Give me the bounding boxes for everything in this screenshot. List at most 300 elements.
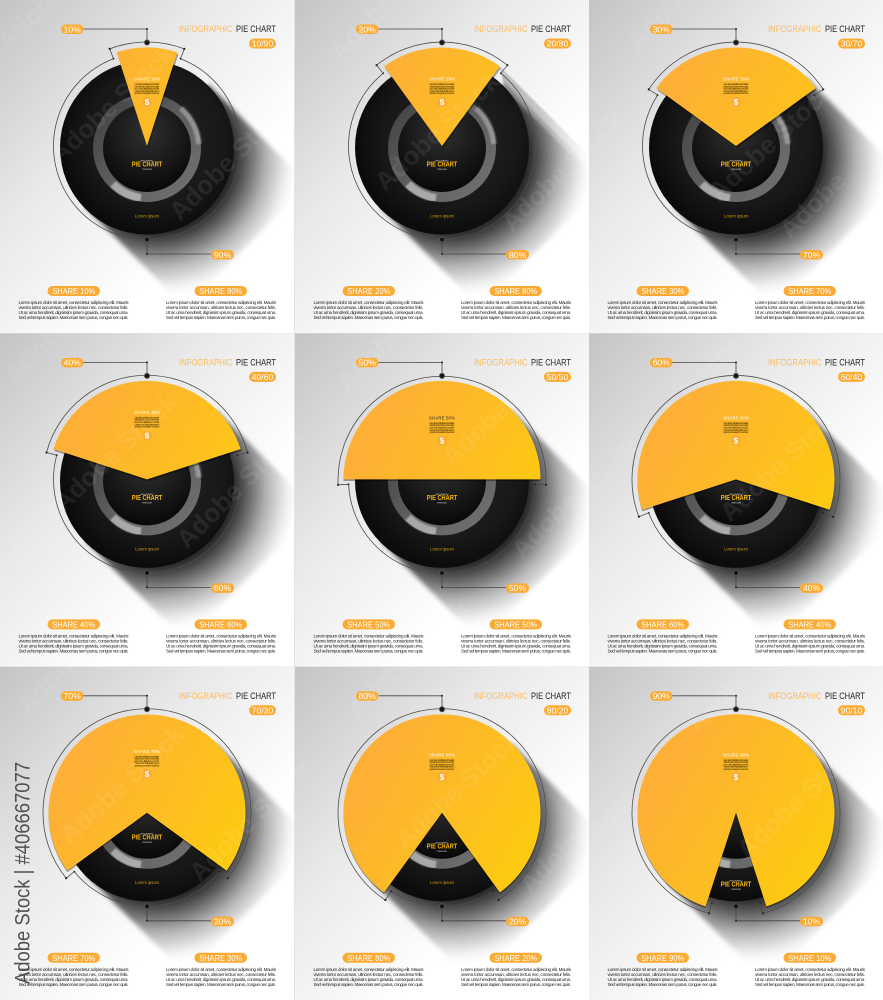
wedge text: gravida, consequat urna sed vel. <box>429 768 455 771</box>
share 30% column: Lorem ipsum dolor sit amet, consectetur adipiscing elit. Mauris <box>608 300 718 305</box>
center label: PIE CHART <box>721 495 752 502</box>
lorem label: Lorem ipsum <box>430 880 454 885</box>
share 20% column: SHARE 20% <box>494 953 538 963</box>
icon: dollar <box>731 97 741 107</box>
wedge text: adipiscing elit. Mauris viverra tortor <box>724 85 749 88</box>
share 10% column <box>18 286 129 320</box>
share 80% column: SHARE 80% <box>347 953 391 963</box>
wedge text <box>429 76 455 95</box>
title <box>179 691 277 701</box>
wedge text: gravida, consequat urna sed vel. <box>134 426 160 429</box>
share 40% column: SHARE 40% <box>788 619 832 629</box>
center label: INFOGRAPHIC <box>140 832 154 835</box>
center label <box>132 832 163 844</box>
top callout 20%: 20% <box>359 24 376 34</box>
share 80% column: Sed vel tempus sapien. Maecenas sem purus, congue nec quis. <box>314 982 424 987</box>
icon: dollar <box>142 430 152 440</box>
ratio badge: 80/20 <box>547 705 568 715</box>
icon: dollar: $ <box>440 436 445 445</box>
share 50% right column <box>461 619 572 653</box>
panel: 30/70 pie chart <box>589 0 883 333</box>
share 90% column: viverra tortor accumsan, ultricies lectus nec, consectetur felis. <box>166 305 276 310</box>
share 50% column: Ut ac urna hendrerit, dignissim ipsum gravida, consequat urna. <box>314 643 424 648</box>
share 60% column: Sed vel tempus sapien. Maecenas sem purus, congue nec quis. <box>166 648 276 653</box>
top callout 70% <box>61 691 148 710</box>
share 40% column: viverra tortor accumsan, ultricies lectus nec, consectetur felis. <box>18 638 128 643</box>
share 90% column <box>166 286 277 320</box>
top node <box>733 40 739 46</box>
share 50% column: Sed vel tempus sapien. Maecenas sem purus, congue nec quis. <box>314 648 424 653</box>
share 60% column: Ut ac urna hendrerit, dignissim ipsum gravida, consequat urna. <box>608 643 718 648</box>
wedge text: gravida, consequat urna sed vel. <box>134 764 160 767</box>
top callout 30%: 30% <box>653 24 670 34</box>
long shadow <box>83 742 292 956</box>
share 70% column: viverra tortor accumsan, ultricies lectus nec, consectetur felis. <box>18 972 128 977</box>
bottom callout 30% <box>144 903 234 927</box>
wedge text <box>723 752 749 771</box>
stock watermarks: Adobe <box>773 166 851 244</box>
share 30% column: Lorem ipsum dolor sit amet, consectetur adipiscing elit. Mauris <box>166 967 277 972</box>
black disk with ring <box>649 394 823 568</box>
share 10% column: Ut ac urna hendrerit, dignissim ipsum gravida, consequat urna. <box>18 310 128 315</box>
share 10% column: viverra tortor accumsan, ultricies lectus nec, consectetur felis. <box>755 972 865 977</box>
panel: 90/10 pie chart <box>589 667 883 1000</box>
icon: dollar: $ <box>734 436 739 445</box>
share 70% column: Ut ac urna hendrerit, dignissim ipsum gravida, consequat urna. <box>18 977 128 982</box>
stock watermarks: Adobe Stock <box>731 734 868 864</box>
share 90% column: Ut ac urna hendrerit, dignissim ipsum gravida, consequat urna. <box>608 977 718 982</box>
bottom callout 70% <box>733 236 823 260</box>
top callout 50%: 50% <box>359 358 376 368</box>
bottom callout 30%: 30% <box>214 917 231 927</box>
stock watermarks: Adobe Stock <box>170 420 304 554</box>
arc end dots <box>45 451 249 456</box>
share 20% column: Sed vel tempus sapien. Maecenas sem purus, congue nec quis. <box>461 982 571 987</box>
wedge text: adipiscing elit. Mauris viverra tortor <box>724 424 749 427</box>
share 20% column: Sed vel tempus sapien. Maecenas sem purus, congue nec quis. <box>314 315 424 320</box>
center label <box>721 160 752 171</box>
share 30% column <box>608 286 718 320</box>
share 70% column: viverra tortor accumsan, ultricies lectus nec, consectetur felis. <box>755 305 865 310</box>
center label: INFOGRAPHIC <box>435 841 449 844</box>
wedge text: Ut ac urna hendrerit, dignissim ipsum <box>724 90 748 93</box>
share 30% column: Sed vel tempus sapien. Maecenas sem purus, congue nec quis. <box>608 315 718 320</box>
long shadow <box>378 66 586 290</box>
title: INFOGRAPHIC <box>768 24 822 34</box>
wedge text: accumsan, ultricies lectus nec, felis. <box>724 88 749 91</box>
bottom callout 80% <box>439 236 529 260</box>
share 40% column: Sed vel tempus sapien. Maecenas sem purus, congue nec quis. <box>18 648 128 653</box>
long shadow <box>674 77 883 308</box>
share 40% column: Ut ac urna hendrerit, dignissim ipsum gravida, consequat urna. <box>755 643 865 648</box>
center label: PIE CHART <box>721 881 752 888</box>
title: INFOGRAPHIC <box>474 357 528 367</box>
share 50% right column: Sed vel tempus sapien. Maecenas sem purus, congue nec quis. <box>461 648 571 653</box>
title: INFOGRAPHIC <box>768 691 822 701</box>
share 40% column: Sed vel tempus sapien. Maecenas sem purus, congue nec quis. <box>755 648 865 653</box>
wedge text: SHARE 60% <box>723 415 749 420</box>
lorem label: Lorem ipsum <box>430 213 454 218</box>
wedge text: gravida, consequat urna sed vel. <box>723 768 749 771</box>
wedge text: Lorem ipsum dolor sit amet, consectetur <box>724 422 749 425</box>
share 90% column: Lorem ipsum dolor sit amet, consectetur adipiscing elit. Mauris <box>608 967 718 972</box>
share 90% column: Sed vel tempus sapien. Maecenas sem purus, congue nec quis. <box>608 982 718 987</box>
stock watermarks: Stock <box>288 870 360 941</box>
share 30% column: Sed vel tempus sapien. Maecenas sem purus, congue nec quis. <box>166 982 276 987</box>
top callout 70%: 70% <box>64 691 81 701</box>
wedge text: SHARE 50% <box>429 415 455 420</box>
bottom callout 60%: 60% <box>214 583 231 593</box>
share 80% column: Lorem ipsum dolor sit amet, consectetur adipiscing elit. Mauris <box>461 300 572 305</box>
stock watermarks: Adobe <box>331 318 409 396</box>
stock watermarks: Adobe <box>505 486 583 564</box>
wedge text: Lorem ipsum dolor sit amet, consectetur <box>135 416 160 419</box>
wedge text: SHARE 20% <box>429 76 455 82</box>
black disk with ring <box>60 394 234 568</box>
stock id vertical label: Adobe Stock | #406667077 <box>12 762 34 984</box>
icon: dollar <box>142 769 152 779</box>
share 40% column: viverra tortor accumsan, ultricies lectus nec, consectetur felis. <box>755 638 865 643</box>
wedge text: Lorem ipsum dolor sit amet, consectetur <box>724 83 749 86</box>
wedge text: gravida, consequat urna sed vel. <box>134 92 160 95</box>
wedge text: Lorem ipsum dolor sit amet, consectetur <box>430 83 455 86</box>
wedge text: adipiscing elit. Mauris viverra tortor <box>135 419 160 422</box>
share 10% column: Sed vel tempus sapien. Maecenas sem purus, congue nec quis. <box>755 982 865 987</box>
long shadow <box>83 82 290 290</box>
stock watermarks: Stock <box>573 433 645 504</box>
share 70% column: Sed vel tempus sapien. Maecenas sem purus, congue nec quis. <box>755 315 865 320</box>
stock watermarks: Adobe Stock <box>54 719 191 849</box>
black disk with ring <box>649 60 823 234</box>
title: INFOGRAPHIC <box>474 24 528 34</box>
share 40% column <box>755 619 866 653</box>
wedge text: SHARE 80% <box>429 752 455 757</box>
share 50% right column: Lorem ipsum dolor sit amet, consectetur adipiscing elit. Mauris <box>461 633 572 638</box>
ratio badge: 70/30 <box>252 705 273 715</box>
center label <box>427 841 458 853</box>
share 10% column: SHARE 10% <box>52 286 96 296</box>
icon: dollar <box>437 435 447 445</box>
share 60% column: Lorem ipsum dolor sit amet, consectetur adipiscing elit. Mauris <box>608 633 718 638</box>
title <box>768 357 866 367</box>
center label: INFOGRAPHIC <box>729 879 743 882</box>
share 40% column <box>18 619 129 653</box>
stock watermarks: Adobe Stock <box>495 103 629 237</box>
wedge text <box>134 410 160 429</box>
share 20% column: SHARE 20% <box>347 286 391 296</box>
wedge text <box>429 752 455 771</box>
outline arcs <box>338 376 546 573</box>
share 80% column: viverra tortor accumsan, ultricies lectus nec, consectetur felis. <box>461 305 571 310</box>
arc end dots <box>376 64 508 74</box>
share 80% column: Lorem ipsum dolor sit amet, consectetur adipiscing elit. Mauris <box>314 967 424 972</box>
share 40% column: SHARE 40% <box>52 619 96 629</box>
stock watermarks: Stock <box>616 890 688 961</box>
yellow wedge <box>344 714 540 894</box>
wedge text <box>723 415 749 434</box>
share 80% column: Sed vel tempus sapien. Maecenas sem purus, congue nec quis. <box>461 315 571 320</box>
center label: TEMPLATE <box>731 168 742 171</box>
icon: dollar: $ <box>145 770 150 779</box>
wedge text: gravida, consequat urna sed vel. <box>429 92 455 95</box>
title <box>768 24 866 34</box>
stock watermarks: Adobe <box>670 329 748 407</box>
share 10% column: Sed vel tempus sapien. Maecenas sem purus, congue nec quis. <box>18 315 128 320</box>
share 20% column: Lorem ipsum dolor sit amet, consectetur adipiscing elit. Mauris <box>461 967 572 972</box>
bottom callout 20%: 20% <box>509 917 526 927</box>
wedge text: accumsan, ultricies lectus nec, felis. <box>724 426 749 429</box>
center label: PIE CHART <box>132 495 163 502</box>
icon: dollar: $ <box>734 773 739 782</box>
panel: 80/20 pie chart <box>295 667 611 1000</box>
top callout 90%: 90% <box>653 691 670 701</box>
lorem label: Lorem ipsum <box>430 547 454 552</box>
share 20% column: viverra tortor accumsan, ultricies lectus nec, consectetur felis. <box>461 972 571 977</box>
title: PIE CHART <box>531 357 572 367</box>
ratio badge: 40/60 <box>252 372 273 382</box>
icon: dollar: $ <box>440 98 445 107</box>
wedge text <box>723 76 749 95</box>
stock watermarks: Adobe <box>341 646 419 724</box>
yellow wedge <box>48 714 246 872</box>
wedge text: Ut ac urna hendrerit, dignissim ipsum <box>430 429 454 432</box>
center label: INFOGRAPHIC <box>729 160 743 162</box>
bottom callout 50% <box>439 570 529 593</box>
long shadow <box>667 744 883 982</box>
black disk with ring <box>649 727 823 901</box>
wedge text: SHARE 90% <box>723 752 749 757</box>
top callout 50% <box>356 358 443 376</box>
wedge text: Ut ac urna hendrerit, dignissim ipsum <box>135 762 159 765</box>
stock watermarks: Stock <box>405 593 477 664</box>
bottom callout 40% <box>733 570 823 593</box>
bottom callout 90% <box>144 236 234 260</box>
top node <box>733 373 739 379</box>
stock watermarks: Adobe Stock <box>436 341 573 471</box>
top node <box>144 373 150 379</box>
wedge text: Lorem ipsum dolor sit amet, consectetur <box>430 759 455 762</box>
bottom callout 20% <box>439 903 529 927</box>
bottom callout 80%: 80% <box>509 250 526 260</box>
ratio badge: 30/70 <box>841 38 862 48</box>
center label: INFOGRAPHIC <box>140 493 154 496</box>
share 90% column <box>608 953 718 987</box>
wedge text: Ut ac urna hendrerit, dignissim ipsum <box>135 423 159 426</box>
wedge text: accumsan, ultricies lectus nec, felis. <box>135 421 160 424</box>
center label: TEMPLATE <box>731 888 742 891</box>
share 50% column <box>314 619 424 653</box>
icon: dollar: $ <box>145 431 150 440</box>
share 70% column: Lorem ipsum dolor sit amet, consectetur adipiscing elit. Mauris <box>755 300 866 305</box>
wedge text: Lorem ipsum dolor sit amet, consectetur <box>135 755 160 758</box>
panel: 50/50 pie chart <box>295 333 611 666</box>
share 60% column: Sed vel tempus sapien. Maecenas sem purus, congue nec quis. <box>608 648 718 653</box>
share 10% column: SHARE 10% <box>788 953 832 963</box>
stock watermarks: Adobe Stock <box>163 92 297 226</box>
panel: 10/90 pie chart <box>0 0 308 333</box>
title: INFOGRAPHIC <box>474 691 528 701</box>
bottom callout 10%: 10% <box>803 917 820 927</box>
share 70% column <box>755 286 866 320</box>
title <box>474 357 572 367</box>
wedge text: Ut ac urna hendrerit, dignissim ipsum <box>430 90 454 93</box>
share 80% column <box>461 286 572 320</box>
arc end dots <box>109 48 185 60</box>
top callout 10% <box>61 24 148 43</box>
share 60% column: viverra tortor accumsan, ultricies lectus nec, consectetur felis. <box>608 638 718 643</box>
share 10% column: Lorem ipsum dolor sit amet, consectetur adipiscing elit. Mauris <box>18 300 129 305</box>
share 70% column: Sed vel tempus sapien. Maecenas sem purus, congue nec quis. <box>18 982 128 987</box>
icon: dollar <box>437 97 447 107</box>
center label: INFOGRAPHIC <box>729 493 743 496</box>
top callout 40%: 40% <box>64 358 81 368</box>
share 50% column: SHARE 50% <box>347 619 391 629</box>
center label: INFOGRAPHIC <box>435 493 449 496</box>
stock watermarks: Adobe Stock <box>369 66 506 196</box>
outline arcs <box>632 709 840 913</box>
long shadow <box>370 742 586 958</box>
share 70% column: SHARE 70% <box>788 286 832 296</box>
share 30% column: Ut ac urna hendrerit, dignissim ipsum gravida, consequat urna. <box>608 310 718 315</box>
top callout 40% <box>61 358 148 376</box>
bottom callout 40%: 40% <box>803 583 820 593</box>
share 30% column: SHARE 30% <box>641 286 685 296</box>
share 90% column: Sed vel tempus sapien. Maecenas sem purus, congue nec quis. <box>166 315 276 320</box>
center label: INFOGRAPHIC <box>140 160 154 162</box>
top node <box>439 40 445 46</box>
wedge text: adipiscing elit. Mauris viverra tortor <box>135 758 160 761</box>
center label: INFOGRAPHIC <box>435 160 449 162</box>
center label: PIE CHART <box>427 495 458 502</box>
black disk with ring <box>355 394 529 568</box>
stock watermarks: Adobe Stock <box>183 753 317 887</box>
wedge text: Lorem ipsum dolor sit amet, consectetur <box>724 759 749 762</box>
title: PIE CHART <box>236 24 277 34</box>
panel: 40/60 pie chart <box>0 333 316 666</box>
center label <box>132 493 163 504</box>
wedge text: gravida, consequat urna sed vel. <box>723 92 749 95</box>
arc end dots <box>708 902 764 914</box>
pie chart 60% <box>632 373 883 641</box>
stock watermarks: Stock <box>573 780 645 851</box>
top callout 60%: 60% <box>653 358 670 368</box>
wedge text <box>429 415 455 434</box>
share 20% column: Lorem ipsum dolor sit amet, consectetur adipiscing elit. Mauris <box>314 300 424 305</box>
yellow wedge <box>117 47 178 148</box>
arc end dots <box>638 512 834 518</box>
share 50% right column: Ut ac urna hendrerit, dignissim ipsum gravida, consequat urna. <box>461 643 571 648</box>
top callout 90% <box>650 691 737 710</box>
top callout 10%: 10% <box>64 24 81 34</box>
center label: TEMPLATE <box>731 501 742 504</box>
long shadow <box>378 408 586 623</box>
stock watermarks: Adobe <box>10 641 88 719</box>
wedge text: adipiscing elit. Mauris viverra tortor <box>430 85 455 88</box>
share 50% column: viverra tortor accumsan, ultricies lectus nec, consectetur felis. <box>314 638 424 643</box>
black disk with ring <box>355 727 529 901</box>
black disk with ring <box>60 60 234 234</box>
top callout 30% <box>650 24 737 43</box>
wedge text: SHARE 70% <box>134 749 160 754</box>
ratio badge: 20/80 <box>547 38 568 48</box>
center label: PIE CHART <box>427 843 458 850</box>
share 80% column: viverra tortor accumsan, ultricies lectus nec, consectetur felis. <box>314 972 424 977</box>
wedge text: Ut ac urna hendrerit, dignissim ipsum <box>724 429 748 432</box>
stock watermarks: Adobe Stock <box>714 397 851 527</box>
share 60% column <box>608 619 718 653</box>
share 60% column <box>166 619 277 653</box>
outline arcs <box>348 42 536 239</box>
title: INFOGRAPHIC <box>179 691 233 701</box>
title: PIE CHART <box>531 691 572 701</box>
share 60% column: SHARE 60% <box>641 619 685 629</box>
yellow wedge <box>53 381 242 481</box>
bottom callout 90%: 90% <box>214 250 231 260</box>
stock watermarks: Adobe Stock <box>47 387 184 517</box>
stock watermarks: Adobe Stock <box>44 39 181 169</box>
wedge text: gravida, consequat urna sed vel. <box>429 431 455 434</box>
center label: TEMPLATE <box>142 841 153 844</box>
share 30% column: Ut ac urna hendrerit, dignissim ipsum gravida, consequat urna. <box>166 977 276 982</box>
share 20% column <box>461 953 572 987</box>
yellow wedge <box>656 47 817 148</box>
stock watermarks: Adobe Stock <box>703 76 840 206</box>
yellow wedge <box>384 47 501 148</box>
top callout 80% <box>356 691 443 710</box>
share 70% column: Ut ac urna hendrerit, dignissim ipsum gravida, consequat urna. <box>755 310 865 315</box>
icon: dollar <box>437 772 447 782</box>
outline arcs <box>642 42 830 240</box>
wedge text: Ut ac urna hendrerit, dignissim ipsum <box>135 90 159 93</box>
pie chart 10% <box>53 40 290 290</box>
outline arcs <box>43 709 251 906</box>
pie chart 90% <box>632 706 883 982</box>
wedge text <box>134 749 160 768</box>
wedge text: adipiscing elit. Mauris viverra tortor <box>430 424 455 427</box>
outline arcs <box>338 709 546 906</box>
share 20% column <box>314 286 424 320</box>
share 20% column: Ut ac urna hendrerit, dignissim ipsum gravida, consequat urna. <box>461 977 571 982</box>
center label <box>427 160 458 171</box>
icon: dollar <box>731 435 741 445</box>
outline arcs <box>632 375 840 573</box>
stock watermarks: Adobe <box>680 660 758 738</box>
wedge text: gravida, consequat urna sed vel. <box>723 431 749 434</box>
long shadow <box>674 410 883 641</box>
yellow wedge <box>344 381 540 481</box>
share 60% column: SHARE 60% <box>199 619 243 629</box>
ratio badge: 90/10 <box>841 705 862 715</box>
share 70% column: Lorem ipsum dolor sit amet, consectetur adipiscing elit. Mauris <box>18 967 129 972</box>
outline arcs <box>46 375 248 573</box>
stock watermarks: Adobe Stock <box>389 724 526 854</box>
icon: dollar: $ <box>145 98 150 107</box>
title <box>179 24 277 34</box>
share 90% column: Lorem ipsum dolor sit amet, consectetur adipiscing elit. Mauris <box>166 300 277 305</box>
center label <box>721 493 752 504</box>
ratio badge: 50/50 <box>547 372 568 382</box>
center label <box>132 160 163 171</box>
top node <box>144 40 150 46</box>
panel: 60/40 pie chart <box>589 333 883 666</box>
title: INFOGRAPHIC <box>768 357 822 367</box>
lorem label: Lorem ipsum <box>135 213 160 218</box>
share 50% right column: viverra tortor accumsan, ultricies lectus nec, consectetur felis. <box>461 638 571 643</box>
top node <box>439 706 445 712</box>
top callout 20% <box>356 24 443 43</box>
share 60% column: Lorem ipsum dolor sit amet, consectetur adipiscing elit. Mauris <box>166 633 277 638</box>
wedge text: accumsan, ultricies lectus nec, felis. <box>430 426 455 429</box>
